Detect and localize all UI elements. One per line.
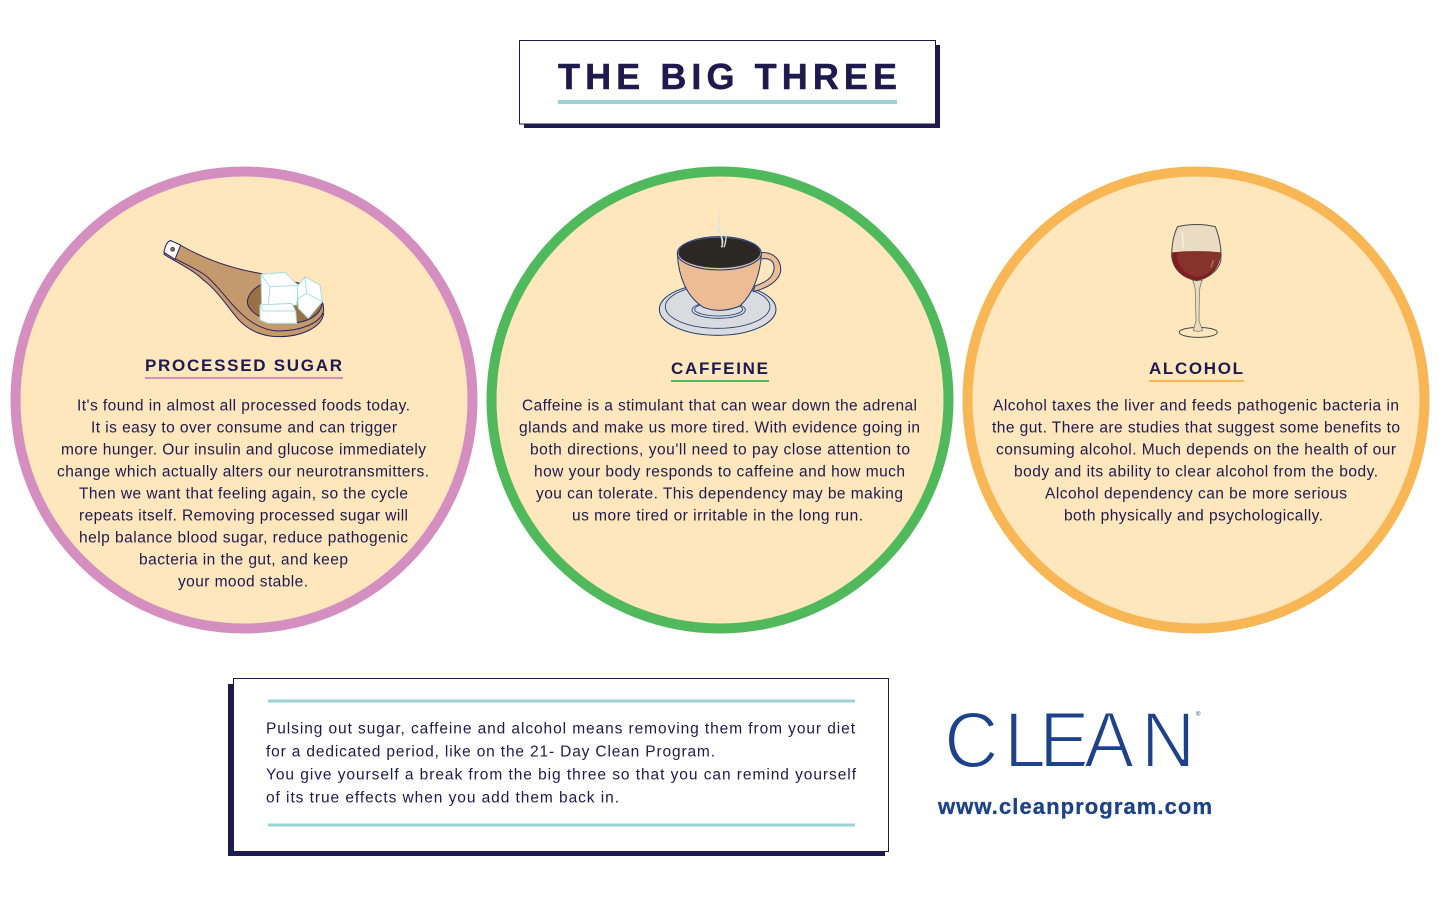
website url: www.cleanprogram.com xyxy=(937,794,1212,819)
text: processed sugar: It's found in almost all processed foods today. xyxy=(77,398,410,414)
callout text: You give yourself a break from the big three so that you can remind yourself xyxy=(266,766,857,784)
text: processed sugar: bacteria in the gut, and keep xyxy=(139,552,348,568)
text: processed sugar: It is easy to over consume and can trigger xyxy=(91,420,397,436)
text: caffeine xyxy=(519,398,920,524)
icon: spoon with sugar cubes xyxy=(164,241,324,337)
heading: processed sugar: PROCESSED SUGAR xyxy=(145,356,342,375)
text: alcohol xyxy=(992,398,1400,524)
logo: CLEAN: CLEAN xyxy=(944,696,1195,784)
text: caffeine: glands and make us more tired. With evidence going in xyxy=(519,420,920,436)
text: alcohol: Alcohol dependency can be more serious xyxy=(1045,486,1347,502)
text: processed sugar: help balance blood sugar, reduce pathogenic xyxy=(79,530,408,546)
text: alcohol: body and its ability to clear alcohol from the body. xyxy=(1014,464,1378,480)
heading: caffeine: CAFFEINE xyxy=(671,359,768,378)
text: caffeine: Caffeine is a stimulant that can wear down the adrenal xyxy=(522,398,917,414)
heading: alcohol: ALCOHOL xyxy=(1149,359,1243,378)
title: THE BIG THREE xyxy=(558,56,897,97)
text: processed sugar: Then we want that feeling again, so the cycle xyxy=(79,486,408,502)
panel: alcohol xyxy=(968,172,1424,628)
panel: processed sugar xyxy=(16,172,472,628)
text: processed sugar: change which actually alters our neurotransmitters. xyxy=(57,464,429,480)
text: processed sugar: repeats itself. Removing processed sugar will xyxy=(79,508,408,524)
callout text: Pulsing out sugar, caffeine and alcohol means removing them from your diet xyxy=(266,720,856,738)
text: processed sugar: your mood stable. xyxy=(178,574,308,590)
text: processed sugar xyxy=(57,398,429,590)
text: caffeine: us more tired or irritable in the long run. xyxy=(572,508,863,524)
text: alcohol: both physically and psychologically. xyxy=(1064,508,1323,524)
panel: caffeine xyxy=(492,172,948,628)
icon: wine glass xyxy=(1172,224,1221,337)
text: alcohol: consuming alcohol. Much depends on the health of our xyxy=(996,442,1396,458)
callout text xyxy=(266,720,857,806)
callout text: of its true effects when you add them back in. xyxy=(266,790,619,806)
callout box xyxy=(228,678,888,856)
text: processed sugar: more hunger. Our insulin and glucose immediately xyxy=(61,442,426,458)
text: caffeine: both directions, you'll need to pay close attention to xyxy=(530,442,910,458)
title box xyxy=(520,40,940,128)
logo: CLEAN: ® xyxy=(1196,711,1201,718)
text: caffeine: how your body responds to caffeine and how much xyxy=(534,464,905,480)
text: alcohol: Alcohol taxes the liver and feeds pathogenic bacteria in xyxy=(993,398,1399,414)
icon: coffee cup xyxy=(659,210,781,335)
text: alcohol: the gut. There are studies that suggest some benefits to xyxy=(992,420,1400,436)
text: caffeine: you can tolerate. This dependency may be making xyxy=(536,486,903,502)
callout text: for a dedicated period, like on the 21- Day Clean Program. xyxy=(266,744,715,760)
